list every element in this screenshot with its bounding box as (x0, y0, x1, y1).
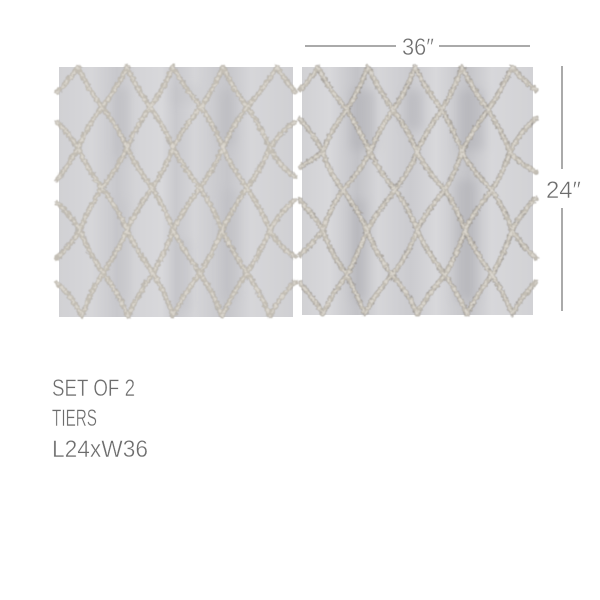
text block: product description: SET OF 2 (52, 375, 135, 402)
pocket shadow right tier (350, 90, 484, 300)
pocket shadow left tier (115, 85, 238, 310)
lattice right tier (300, 67, 536, 314)
panel: left curtain tier (57, 67, 295, 317)
dimension: width 36 inches: 36″ (402, 34, 434, 61)
text block: product description: L24xW36 (52, 436, 148, 463)
lattice left tier (57, 67, 295, 316)
panel: right curtain tier (300, 67, 536, 315)
dimension: height 24 inches: 24″ (546, 177, 581, 204)
text block: product description: TIERS (52, 405, 97, 432)
text block: product description (52, 375, 148, 463)
